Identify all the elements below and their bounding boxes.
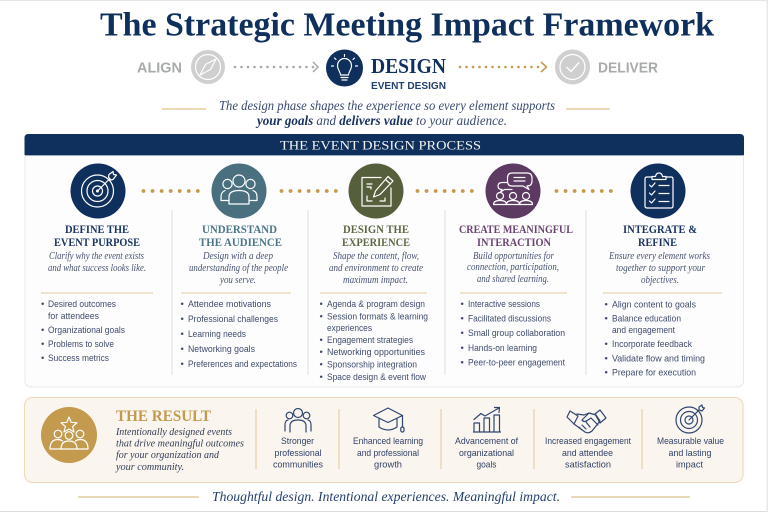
step 4: create meaningful interaction: Facilitated discussions <box>468 314 551 324</box>
outcome: organizational goals <box>455 408 518 470</box>
step 4: create meaningful interaction: Hands-on learning <box>468 343 537 354</box>
step 3: design the experience: and environment to create <box>329 262 423 274</box>
step 4: create meaningful interaction: and shared learning. <box>477 273 549 285</box>
phase: deliver <box>555 50 659 84</box>
step 4: create meaningful interaction: • <box>460 343 464 354</box>
step 4: create meaningful interaction: CREATE MEANINGFUL <box>459 224 573 236</box>
outcome: engagement: and attendee <box>562 448 613 459</box>
step 1: define the event purpose: Success metrics <box>48 353 109 364</box>
phase: deliver: DELIVER <box>598 60 659 76</box>
step 2: understand the audience: • <box>180 299 184 310</box>
panel: the result <box>24 398 743 482</box>
step 3: design the experience: • <box>320 347 323 358</box>
process banner <box>24 134 744 155</box>
step 4: create meaningful interaction <box>459 164 573 368</box>
step 2: understand the audience: • <box>180 344 184 355</box>
step 2: understand the audience: • <box>180 314 184 325</box>
outcome: communities: communities <box>273 460 323 470</box>
phase: design: DESIGN <box>371 54 446 78</box>
outcome: learning: growth <box>374 460 402 470</box>
step 3: design the experience: Networking opportunities <box>327 347 425 358</box>
step 4: create meaningful interaction: connection, participation, <box>467 261 559 273</box>
step 3: design the experience: DESIGN THE <box>343 224 409 236</box>
step 1: define the event purpose: Clarify why the event exists <box>49 250 144 262</box>
step 2: understand the audience: Professional challenges <box>188 314 278 325</box>
intro statement <box>162 98 610 128</box>
step 1: define the event purpose: for attendees <box>48 311 99 322</box>
step 2: understand the audience: Design with a deep <box>202 250 273 262</box>
panel: event design process <box>24 134 744 387</box>
phase: align <box>137 50 225 84</box>
outcome: engagement: Increased engagement <box>545 436 631 447</box>
outcome: communities: Stronger <box>281 436 314 447</box>
step 2: understand the audience: Preferences and expectations <box>188 359 297 370</box>
step 1: define the event purpose: • <box>41 353 44 364</box>
outcome: learning <box>353 408 423 470</box>
outcome: communities: professional <box>274 448 322 459</box>
step 1: define the event purpose <box>41 164 153 364</box>
phase: design: EVENT DESIGN <box>371 81 446 92</box>
step 2: understand the audience: • <box>180 359 184 370</box>
icon: people <box>212 164 266 218</box>
outcome: communities <box>273 408 323 470</box>
result description: for your organization and <box>116 449 220 461</box>
step 4: create meaningful interaction: • <box>460 314 464 324</box>
step 3: design the experience: Space design & event flow <box>327 372 426 383</box>
step 3: design the experience: experiences <box>327 323 372 334</box>
step 5: integrate and refine: and engagement <box>612 325 675 336</box>
title: The Strategic Meeting Impact Framework <box>100 6 714 44</box>
step 5: integrate and refine: • <box>604 314 608 324</box>
step 4: create meaningful interaction: Build opportunities for <box>473 250 555 262</box>
step 5: integrate and refine <box>603 164 722 378</box>
icon: layout and pencil <box>348 164 404 218</box>
step 4: create meaningful interaction: Small group collaboration <box>468 328 565 339</box>
step 3: design the experience: Session formats & learning <box>327 312 428 322</box>
step 1: define the event purpose: Organizational goals <box>48 325 125 336</box>
step 5: integrate and refine: Validate flow and timing <box>612 354 705 364</box>
step 2: understand the audience: THE AUDIENCE <box>199 237 282 249</box>
step 2: understand the audience: Learning needs <box>188 329 246 340</box>
intro statement: The design phase shapes the experience so every element supports <box>219 98 555 113</box>
result heading: THE RESULT <box>116 408 212 425</box>
step 3: design the experience: • <box>320 312 323 322</box>
icon: target <box>70 164 126 218</box>
step 4: create meaningful interaction: Peer-to-peer engagement <box>468 358 565 368</box>
arrow: design to deliver <box>460 62 546 72</box>
step 5: integrate and refine: • <box>604 354 608 364</box>
icon: star over people <box>41 407 97 463</box>
step 2: understand the audience: • <box>180 329 184 340</box>
icon: discussion group <box>486 164 540 218</box>
step 3: design the experience: Engagement strategies <box>327 335 413 346</box>
step 5: integrate and refine: together to support your <box>616 262 706 274</box>
step 5: integrate and refine: INTEGRATE & <box>623 224 697 236</box>
step 2: understand the audience <box>180 164 297 370</box>
step 3: design the experience: EXPERIENCE <box>342 237 410 249</box>
result description: Intentionally designed events <box>115 426 232 438</box>
step 4: create meaningful interaction: • <box>460 358 464 368</box>
step 1: define the event purpose: and what success looks like. <box>48 262 146 274</box>
outcome: learning: Enhanced learning <box>353 436 423 447</box>
outcome: measurable value: and lasting <box>668 448 712 459</box>
step 4: create meaningful interaction: • <box>460 328 464 339</box>
outcome: learning: and professional <box>357 448 419 459</box>
phase: design <box>326 50 446 92</box>
step 1: define the event purpose: • <box>41 299 44 310</box>
arrow: align to design <box>235 62 318 72</box>
outcome: measurable value: Measurable value <box>657 436 724 447</box>
step 3: design the experience <box>320 164 428 383</box>
step 2: understand the audience: you serve. <box>219 274 256 286</box>
step 5: integrate and refine: Prepare for execution <box>612 368 696 378</box>
step 5: integrate and refine: Incorporate feedback <box>612 339 692 350</box>
step 2: understand the audience: understanding of the people <box>189 262 288 274</box>
outcome: measurable value <box>657 405 724 470</box>
step 3: design the experience: Agenda & program design <box>327 299 425 310</box>
result description: that drive meaningful outcomes <box>116 438 244 450</box>
step 2: understand the audience: UNDERSTAND <box>202 224 277 236</box>
outcome: organizational goals: goals <box>476 460 497 470</box>
step 1: define the event purpose: EVENT PURPOSE <box>54 237 140 249</box>
outcome: engagement <box>545 410 631 470</box>
step 1: define the event purpose: DEFINE THE <box>65 224 129 236</box>
phase stepper <box>137 50 659 92</box>
step 5: integrate and refine: Align content to goals <box>612 300 696 310</box>
step 5: integrate and refine: • <box>604 339 608 350</box>
intro statement: your goals and delivers value to your audience. <box>255 113 507 128</box>
step 5: integrate and refine: • <box>604 368 608 378</box>
step 4: create meaningful interaction: • <box>460 299 464 310</box>
step 5: integrate and refine: REFINE <box>638 237 677 249</box>
step 4: create meaningful interaction: INTERACTION <box>477 237 552 249</box>
result description: your community. <box>115 461 184 473</box>
step 2: understand the audience: Attendee motivations <box>188 299 271 310</box>
step 5: integrate and refine: Ensure every element works <box>608 250 710 262</box>
icon: clipboard <box>630 164 686 218</box>
step 5: integrate and refine: • <box>604 300 608 310</box>
step 3: design the experience: maximum impact. <box>343 274 408 286</box>
outcome: organizational goals: Advancement of <box>455 436 518 447</box>
step 1: define the event purpose: • <box>41 325 44 336</box>
closing tagline: Thoughtful design. Intentional experiences. Meaningful impact. <box>212 490 560 505</box>
step 5: integrate and refine: Balance education <box>612 314 681 324</box>
step 2: understand the audience: Networking goals <box>188 344 255 355</box>
step 3: design the experience: • <box>320 335 323 346</box>
step 1: define the event purpose: Desired outcomes <box>48 299 116 310</box>
step 1: define the event purpose: • <box>41 339 44 350</box>
step 3: design the experience: • <box>320 299 323 310</box>
process banner: THE EVENT DESIGN PROCESS <box>280 138 481 152</box>
outcome: engagement: satisfaction <box>565 460 611 470</box>
phase: align: ALIGN <box>137 60 182 76</box>
step 3: design the experience: Sponsorship integration <box>327 360 417 370</box>
step 4: create meaningful interaction: Interactive sessions <box>468 299 540 310</box>
result description <box>115 426 244 473</box>
step 5: integrate and refine: objectives. <box>641 274 679 286</box>
outcome: organizational goals: organizational <box>459 448 514 459</box>
step 1: define the event purpose: Problems to solve <box>48 339 114 350</box>
step 3: design the experience: • <box>320 372 323 383</box>
step 3: design the experience: • <box>320 360 323 370</box>
step 3: design the experience: Shape the content, flow, <box>333 250 419 262</box>
outcome: measurable value: impact <box>676 460 703 470</box>
